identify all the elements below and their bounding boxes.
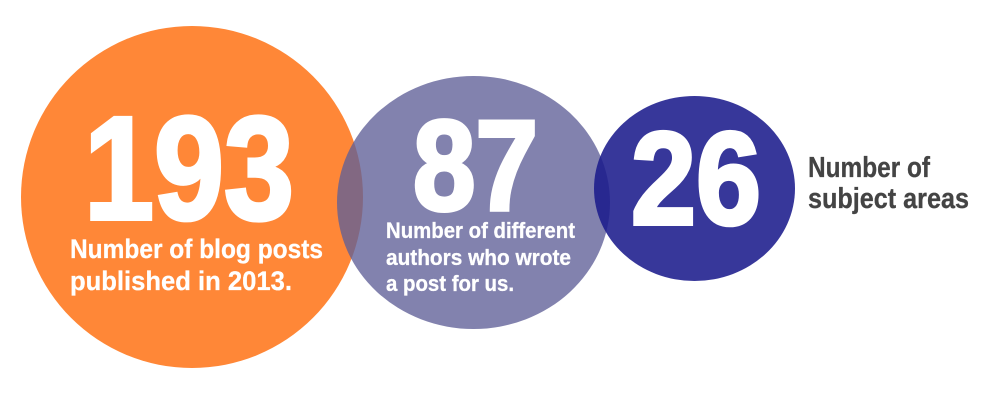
number: 193: 193 [84, 87, 294, 251]
label: blog posts: published in 2013. [70, 266, 292, 296]
orange circle [21, 26, 363, 368]
blue ellipse [594, 96, 795, 281]
panel: subject areas circle [594, 96, 795, 281]
label: subject areas [808, 152, 969, 215]
label: authors [386, 218, 576, 296]
panel: blog posts circle [21, 26, 363, 368]
label: blog posts: Number of blog posts [70, 234, 323, 264]
label: authors: Number of different [386, 218, 576, 243]
label: authors: authors who wrote [386, 245, 571, 270]
number: 87: 87 [413, 95, 538, 238]
label: subject areas: Number of [808, 152, 930, 184]
label: blog posts [70, 234, 323, 296]
panel: authors circle [337, 76, 610, 329]
number: 26: 26 [631, 105, 761, 252]
label: authors: a post for us. [386, 271, 514, 296]
purple ellipse [337, 76, 610, 329]
